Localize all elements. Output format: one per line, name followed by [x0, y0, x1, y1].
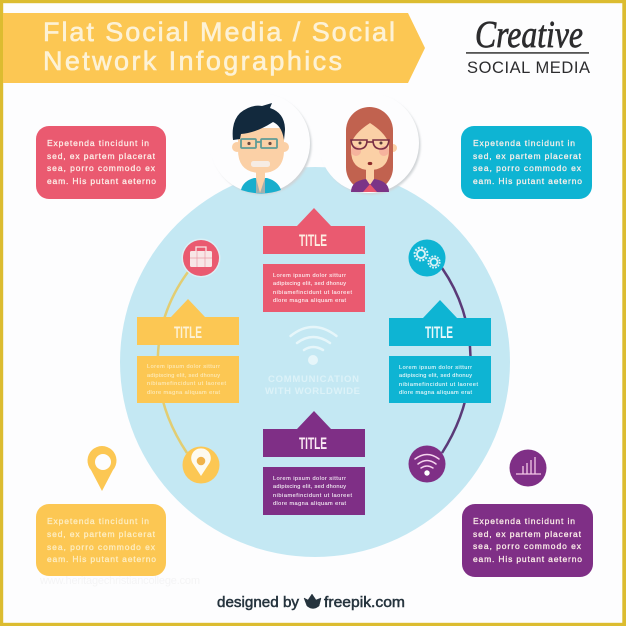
logo: Creative Social Media: SOCIAL MEDIA [467, 59, 590, 77]
title text: Flat Social Media / Social [43, 17, 395, 47]
callout: red: sea, porro commodo ex [47, 163, 156, 173]
purple connector arc [442, 268, 471, 453]
card: cyan title: Lorem ipsum dolor sitturr [399, 365, 472, 371]
card: cyan title: adipiscing elit, sed dhonuy [399, 373, 472, 379]
card: pink title: TITLE [299, 231, 327, 250]
main light blue circle [120, 167, 510, 557]
icon: map pin [88, 446, 117, 491]
card: yellow title: Lorem ipsum dolor sitturr [147, 364, 220, 370]
logo: Creative Social Media [466, 14, 590, 77]
callout: yellow [36, 504, 166, 576]
center wifi and communication label: WITH WORLDWIDE [265, 386, 360, 397]
title text [43, 17, 395, 76]
callout: cyan: eam. His putant aeterno [473, 176, 582, 186]
callout: yellow: sea, porro commodo ex [47, 542, 156, 552]
icon: location circle [182, 446, 220, 484]
footer credit: designed by [217, 595, 300, 611]
icon: wifi circle [408, 446, 446, 482]
card: purple title [263, 411, 365, 515]
avatar: man [210, 93, 312, 194]
logo: Creative Social Media: Creative [475, 14, 583, 56]
card: yellow title: dlore magna aliquam erat [147, 390, 220, 396]
card: cyan title [389, 300, 491, 403]
card: purple title: Lorem ipsum dolor sitturr [273, 476, 346, 482]
avatar: woman [319, 93, 420, 194]
icon: gears [408, 240, 446, 276]
card: pink title: adipiscing elit, sed dhonuy [273, 281, 346, 287]
card: purple title: nibiamefincidunt ut laoreet [273, 493, 352, 499]
card: pink title [263, 208, 365, 312]
callout: purple: eam. His putant aeterno [473, 554, 582, 564]
icon: briefcase [182, 238, 220, 278]
card: purple title: dlore magna aliquam erat [273, 501, 346, 507]
watermark: www.heritagechristiancollege.com [39, 575, 200, 587]
callout: yellow: sed, ex partem placerat [47, 529, 156, 539]
card: pink title: Lorem ipsum dolor sitturr [273, 273, 346, 279]
callout: purple: sed, ex partem placerat [473, 529, 582, 539]
card: yellow title: TITLE [174, 323, 202, 342]
card: yellow title: nibiamefincidunt ut laoreet [147, 381, 226, 387]
card: cyan title: nibiamefincidunt ut laoreet [399, 382, 478, 388]
callout: purple: Expetenda tincidunt in [473, 516, 575, 526]
card: purple title: adipiscing elit, sed dhonuy [273, 484, 346, 490]
card: cyan title: TITLE [425, 323, 453, 342]
center wifi and communication label: COMMUNICATION [268, 374, 359, 385]
footer credit [217, 594, 405, 611]
card: cyan title: dlore magna aliquam erat [399, 390, 472, 396]
callout: cyan [461, 126, 592, 199]
yellow connector arc [158, 268, 191, 453]
callout: cyan: sea, porro commodo ex [473, 163, 582, 173]
callout: red [36, 126, 166, 199]
card: yellow title [137, 299, 239, 403]
callout: red: eam. His putant aeterno [47, 176, 156, 186]
callout: cyan: Expetenda tincidunt in [473, 138, 575, 148]
card: yellow title: adipiscing elit, sed dhonuy [147, 373, 220, 379]
icon: freepik logo [304, 594, 321, 608]
callout: cyan: sed, ex partem placerat [473, 151, 582, 161]
callout: red: Expetenda tincidunt in [47, 138, 149, 148]
title text: Network Infographics [43, 46, 342, 76]
card: purple title: TITLE [299, 434, 327, 453]
card: pink title: dlore magna aliquam erat [273, 298, 346, 304]
callout: purple [462, 504, 593, 577]
card: pink title: nibiamefincidunt ut laoreet [273, 290, 352, 296]
center wifi and communication label [265, 327, 360, 397]
callout: red: sed, ex partem placerat [47, 151, 156, 161]
icon: bar chart circle [510, 450, 546, 486]
title ribbon [3, 13, 425, 83]
callout: yellow: eam. His putant aeterno [47, 554, 156, 564]
callout: purple: sea, porro commodo ex [473, 541, 582, 551]
footer credit: freepik.com [324, 595, 405, 611]
callout: yellow: Expetenda tincidunt in [47, 516, 149, 526]
